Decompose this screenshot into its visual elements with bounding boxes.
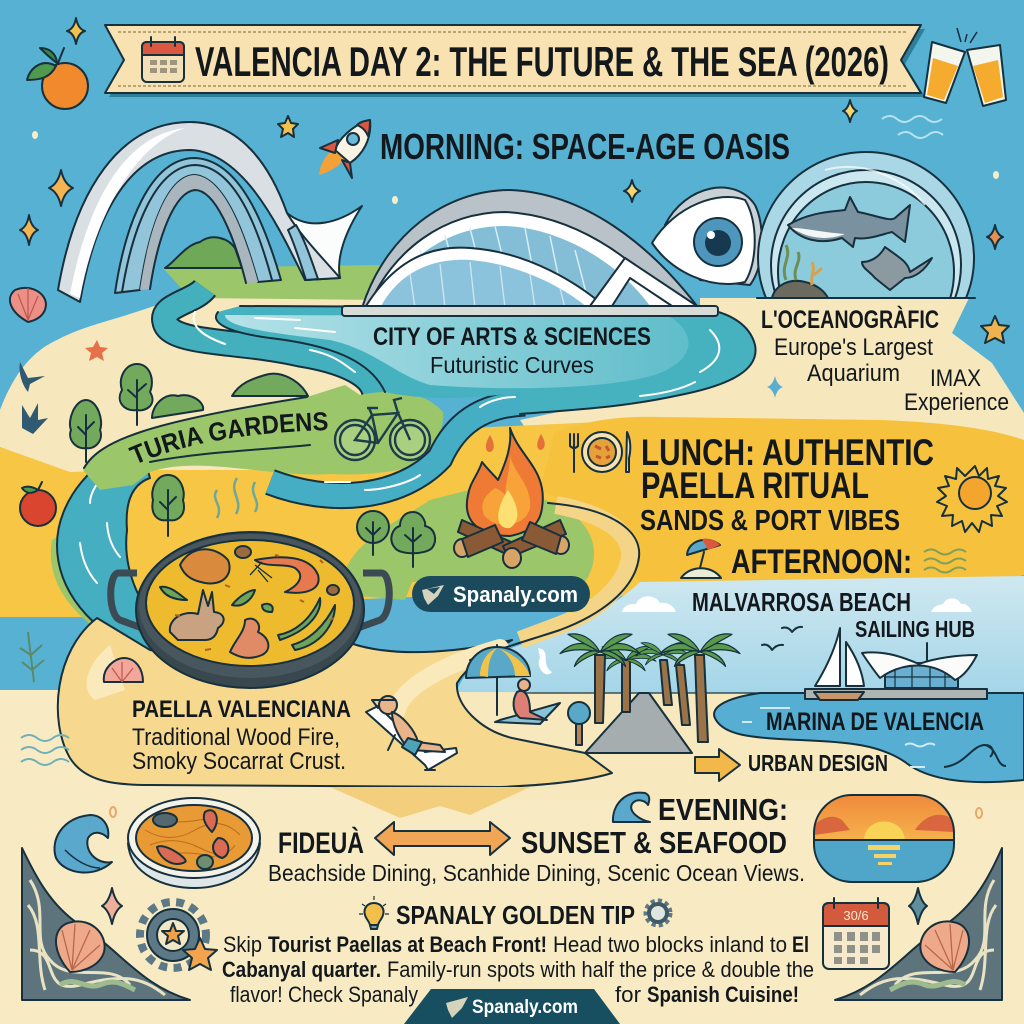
icon: campfire — [454, 428, 569, 568]
text block: golden tip — [222, 932, 814, 1007]
icon: marina building and sailboat — [805, 628, 987, 700]
label: fideua: FIDEUÀ — [278, 826, 364, 860]
icon: beach umbrella and person — [466, 645, 560, 724]
text block: golden tip: Cabanyal quarter. — [222, 957, 381, 982]
panel: paella sand area — [58, 618, 612, 818]
rabbit — [170, 590, 224, 640]
label: oceanografic: Aquarium — [807, 360, 900, 387]
icons: bottom sparkles — [102, 888, 927, 924]
icon: Oceanografic aquarium dome — [756, 151, 976, 299]
green beans — [278, 598, 320, 640]
label: city of arts: Futuristic Curves — [430, 352, 594, 378]
label: paella valenciana: PAELLA VALENCIANA — [132, 696, 351, 723]
text block: golden tip: Skip — [223, 932, 262, 957]
icon: light bulb — [359, 896, 389, 929]
chicken — [180, 549, 230, 583]
arrow: urban design — [695, 749, 740, 781]
river: lagoon in front of City of Arts — [216, 306, 756, 414]
icon: wave in marina — [944, 745, 1006, 767]
river: right branch — [270, 397, 525, 496]
text block: golden tip: flavor! Check Spanaly — [230, 982, 418, 1007]
title banner — [105, 25, 925, 97]
text block: golden tip: El — [792, 932, 809, 957]
label: oceanografic: L'OCEANOGRÀFIC — [761, 305, 939, 334]
icon: paella pan — [111, 532, 389, 688]
heading: afternoon: AFTERNOON: — [731, 543, 912, 581]
label: oceanografic — [761, 305, 1009, 416]
icon: rocket — [319, 120, 370, 178]
label: Turia Gardens: TURIA GARDENS — [128, 412, 328, 463]
river: lower bend — [57, 445, 175, 652]
icon: stingray — [862, 247, 932, 290]
icon: clouds — [622, 596, 972, 612]
badge: Spanaly.com: Spanaly.com — [453, 582, 578, 607]
label: city of arts: CITY OF ARTS & SCIENCES — [373, 323, 651, 351]
heading: lunch: LUNCH: AUTHENTIC — [641, 432, 934, 473]
heading: lunch: SANDS & PORT VIBES — [640, 505, 900, 537]
badge: bottom Spanaly.com tab — [404, 989, 620, 1024]
panel: road around the fire — [470, 503, 639, 660]
icon: shark — [788, 197, 910, 247]
icon: small wave — [613, 793, 650, 822]
badge: Spanaly.com — [412, 576, 590, 612]
icon: birds — [762, 627, 802, 650]
panel: marina water — [520, 693, 1024, 782]
panel: land under arch — [163, 265, 385, 300]
text block: golden tip: for — [615, 982, 641, 1007]
badge: bottom Spanaly.com tab: Spanaly.com — [472, 997, 578, 1018]
icon: Hemisferic eye — [652, 188, 762, 285]
icon: fideua bowl — [128, 798, 260, 888]
label: paella valenciana: Smoky Socarrat Crust. — [132, 748, 346, 775]
icon: sun — [937, 466, 1007, 532]
icon: bottom calendar — [823, 898, 889, 969]
shrimp — [255, 557, 319, 593]
text block: golden tip: Tourist Paellas at Beach Front! — [268, 932, 547, 957]
icon: green waves — [924, 550, 966, 572]
label: oceanografic: Experience — [904, 389, 1009, 416]
text: evening description: Beachside Dining, Scanhide Dining, Scenic Ocean Views. — [268, 860, 805, 886]
text block: golden tip: Spanish Cuisine! — [647, 982, 799, 1007]
heading: morning: MORNING: SPACE-AGE OASIS — [380, 126, 790, 167]
decorations: stars and sparkles — [20, 18, 1009, 398]
icon: bicycle — [335, 398, 430, 460]
icon: white arch building — [58, 122, 362, 302]
icon: beer glasses — [924, 28, 1006, 106]
label: paella valenciana: Traditional Wood Fire, — [132, 724, 340, 751]
icon: sunset — [814, 795, 954, 883]
icon: plate and cutlery — [570, 432, 630, 472]
trees and bushes in Turia Gardens — [70, 364, 435, 567]
label: sailing hub: SAILING HUB — [855, 616, 975, 642]
icon: man on lounge chair — [366, 696, 457, 770]
label: Malvarrosa beach: MALVARROSA BEACH — [692, 587, 911, 617]
meat — [230, 619, 268, 658]
decorations: shells, leaves, footprints and apple — [10, 116, 999, 818]
label: paella valenciana — [132, 696, 351, 775]
icon: banner calendar — [142, 37, 184, 82]
panel: fire island green — [345, 482, 594, 600]
label: oceanografic: Europe's Largest — [774, 334, 933, 361]
icon: wave bottom left — [54, 815, 112, 873]
icon: round signpost — [568, 702, 590, 745]
icon: gear and stars — [140, 902, 217, 970]
panel: green outside river bend — [51, 535, 115, 632]
arrow: double headed — [375, 822, 510, 855]
icon: island umbrella — [681, 539, 721, 578]
label: city of arts — [373, 323, 651, 378]
label: oceanografic: IMAX — [930, 365, 981, 392]
herbs and olives — [160, 587, 273, 612]
hill behind arch — [165, 237, 242, 268]
river: upper Turia — [165, 288, 375, 405]
icon: left Celtic corner with shell — [22, 848, 190, 1000]
text block: golden tip: Head two blocks inland to — [553, 932, 787, 957]
icon: science museum dome — [342, 190, 718, 316]
heading: evening — [521, 792, 788, 860]
heading: evening: EVENING: — [658, 792, 788, 827]
panel: Turia Gardens green ribbon — [83, 385, 443, 490]
heading: lunch: PAELLA RITUAL — [641, 465, 869, 506]
icon: small gear — [646, 901, 670, 925]
icon: orange — [27, 48, 88, 109]
heading: evening: SUNSET & SEAFOOD — [521, 825, 787, 860]
icon: grey promenade — [585, 693, 692, 753]
icons: palm trees — [560, 634, 740, 742]
text block: golden tip: Family-run spots with half the price & double the — [387, 957, 814, 982]
icon: bottom calendar: 30/6 — [843, 908, 869, 923]
icon: right Celtic corner with shell — [835, 848, 1002, 1000]
icon: steam — [215, 478, 257, 518]
label: urban design: URBAN DESIGN — [748, 750, 888, 776]
heading: lunch — [640, 432, 934, 537]
heading: golden tip: SPANALY GOLDEN TIP — [396, 900, 635, 930]
